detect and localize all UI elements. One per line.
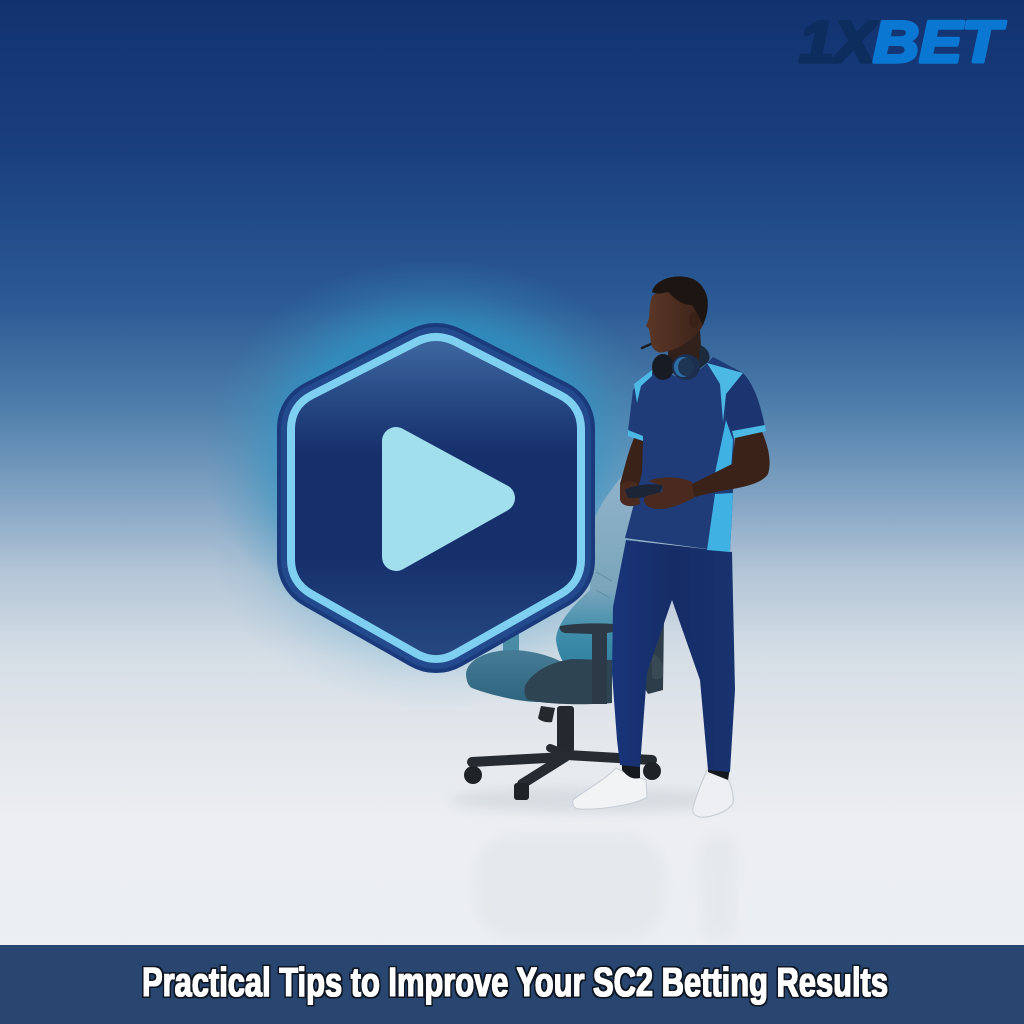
- chair side bolster: [524, 659, 612, 704]
- title banner: [0, 945, 1024, 1024]
- chair casters: [464, 762, 661, 800]
- socks: [622, 762, 730, 780]
- chair seat: [466, 650, 562, 702]
- floor shadow: [450, 788, 730, 812]
- chair back post: [503, 630, 519, 654]
- cyan ring: [303, 349, 569, 647]
- chair backrest: [556, 460, 642, 676]
- left hand: [620, 481, 640, 506]
- logo BET: BET: [873, 10, 1006, 75]
- headphone band: [698, 345, 710, 370]
- left forearm: [620, 438, 646, 492]
- chair base: [472, 748, 652, 784]
- hexagon glow lower: [211, 380, 661, 710]
- floor reflections: [475, 835, 736, 940]
- hair: [652, 276, 708, 325]
- gaming chair: [464, 460, 664, 800]
- controller: [625, 484, 663, 498]
- right shoe: [693, 770, 733, 817]
- shirt torso: [625, 357, 765, 552]
- ear: [689, 312, 699, 328]
- chair back side: [640, 616, 664, 694]
- hexagon face: [303, 349, 569, 647]
- chair backrest seams: [596, 572, 612, 598]
- shirt shoulder stripe: [634, 370, 652, 403]
- shirt shoulder panel: [707, 363, 743, 422]
- microphone: [642, 343, 653, 348]
- logo 1X: 1X: [799, 10, 879, 75]
- left shoe: [573, 768, 647, 809]
- bezel highlight: [303, 349, 569, 647]
- neck: [668, 330, 702, 376]
- face: [646, 288, 706, 353]
- trousers: [612, 540, 735, 772]
- headphone cups: [652, 354, 700, 380]
- chair side pad: [652, 654, 663, 679]
- hexagon play badge: [303, 349, 569, 647]
- hexagon glow upper: [204, 258, 668, 642]
- shirt sleeve cuff left: [628, 430, 643, 441]
- player figure: [573, 276, 770, 817]
- chair gas lift: [557, 706, 574, 752]
- banner bar: [0, 945, 1024, 1024]
- outer bezel: [303, 349, 569, 647]
- shirt sleeve right: [726, 373, 765, 438]
- chair lever: [538, 706, 555, 722]
- right arm: [680, 432, 770, 498]
- 1XBET logo: [799, 10, 1006, 75]
- right hand: [644, 477, 694, 509]
- play triangle: [396, 441, 501, 557]
- shirt sleeve cuff right: [732, 425, 766, 439]
- chair armrest: [560, 623, 613, 704]
- shirt side panel: [707, 420, 733, 552]
